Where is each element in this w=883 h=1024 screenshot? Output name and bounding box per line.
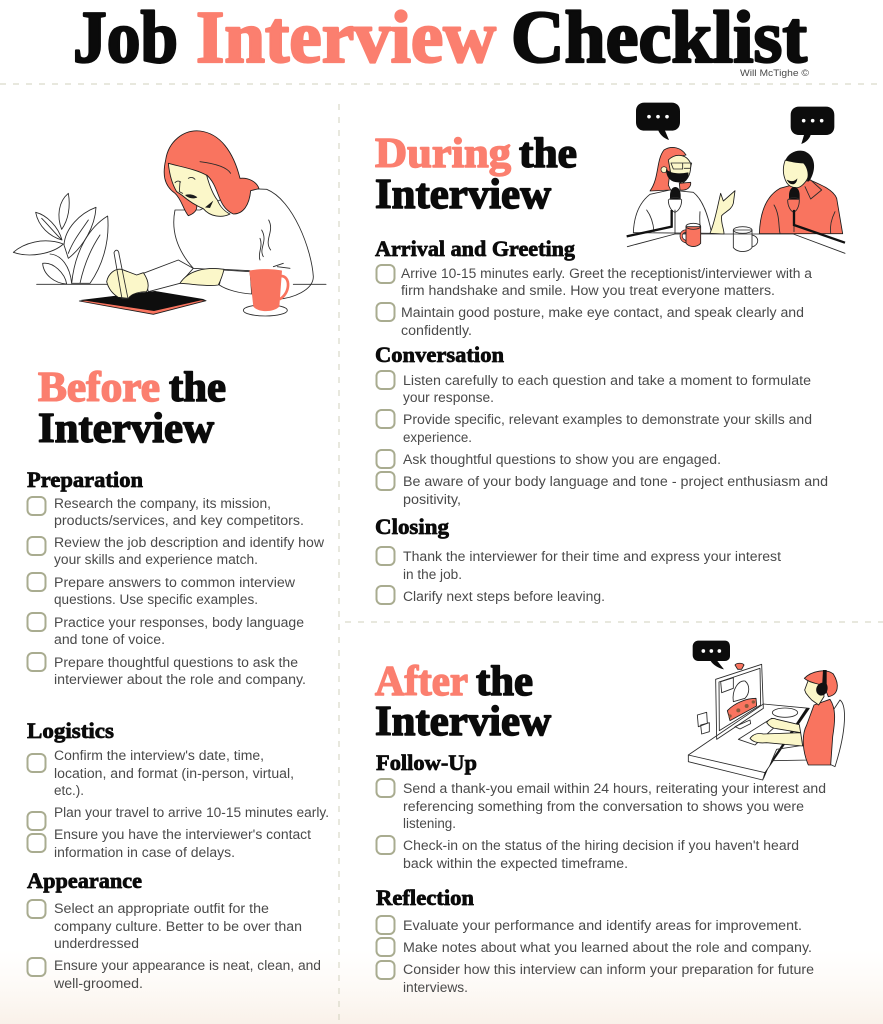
sweater (174, 188, 313, 299)
checklist: follow-up: Send a thank-you email within 24 hours, reiterating your interest and (403, 781, 826, 796)
checklist: conversation: Be aware of your body language and tone - project enthusiasm and (403, 474, 828, 489)
cream cup (733, 230, 758, 252)
checklist: reflection: Consider how this interview can inform your preparation for future (403, 962, 814, 977)
checklist: logistics: location, and format (in-person, virtual, (54, 766, 294, 781)
person (750, 670, 837, 765)
checklist: preparation: products/services, and key competitors. (54, 513, 304, 528)
heading: closing: Closing (375, 514, 449, 539)
checklist: preparation: interviewer about the role and company. (54, 672, 306, 687)
author credit: Will McTighe © (740, 68, 809, 79)
checklist: reflection: Make notes about what you learned about the role and company. (403, 940, 812, 955)
sticky notes (697, 712, 709, 734)
heading: during the interview: the (519, 131, 577, 177)
checklist: reflection: interviews. (403, 980, 468, 995)
heading: arrival and greeting: Arrival and Greeting (375, 236, 575, 261)
checklist: appearance: Select an appropriate outfit for the (54, 901, 269, 916)
heading: after the interview: the (476, 659, 533, 705)
left hand and pen (107, 269, 148, 298)
checklist: logistics: Confirm the interview's date, time, (54, 748, 264, 763)
desk (627, 210, 845, 243)
notepad (772, 708, 798, 717)
panel: logistics (27, 718, 329, 860)
checklist: logistics: information in case of delays. (54, 845, 235, 860)
checklist: conversation: positivity, (403, 492, 461, 507)
heading: during the interview: During (375, 131, 511, 177)
illustration: two people talking at microphones (627, 103, 845, 253)
checklist: follow-up: referencing something from the conversation to shows you were (403, 799, 804, 814)
checklist: logistics: Ensure you have the interviewer's contact (54, 827, 311, 842)
checklist: preparation: Research the company, its mission, (54, 496, 271, 511)
checklist: preparation: your skills and experience match. (54, 552, 258, 567)
checklist: follow-up (376, 779, 826, 871)
keyboard (738, 718, 782, 745)
checklist: appearance: well-groomed. (53, 976, 143, 991)
checklist: logistics: etc.). (54, 783, 84, 798)
checklist: arrival and greeting: Maintain good posture, make eye contact, and speak clearly and (401, 305, 804, 320)
illustration: person on video call at desk (688, 641, 845, 780)
left person (633, 147, 735, 234)
checklist: follow-up: Check-in on the status of the hiring decision if you haven't heard (403, 838, 799, 853)
monitor (716, 664, 763, 739)
checklist: appearance: company culture. Better to be over than (54, 919, 302, 934)
checklist: preparation: Practice your responses, body language (54, 615, 304, 630)
panel: appearance (27, 868, 321, 991)
checklist: arrival and greeting: Arrive 10-15 minutes early. Greet the receptionist/interviewer with a (401, 266, 813, 281)
heading: after the interview: After (375, 659, 468, 705)
heading: follow-up: Follow-Up (376, 750, 477, 775)
checklist: follow-up: back within the expected timeframe. (403, 856, 628, 871)
checklist: preparation: Prepare thoughtful questions to ask the (54, 655, 298, 670)
right hand (180, 268, 224, 286)
checklist: conversation: Listen carefully to each question and take a moment to formulate (403, 373, 811, 388)
hair (164, 131, 259, 216)
red cup (681, 231, 687, 242)
checklist: logistics (28, 748, 329, 860)
checklist: appearance: Ensure your appearance is neat, clean, and (54, 958, 321, 973)
checklist: conversation (376, 371, 828, 507)
panel: preparation (27, 467, 324, 687)
heading: logistics: Logistics (27, 718, 114, 743)
checklist: appearance: underdressed (54, 936, 139, 951)
heading: after the interview (375, 659, 552, 745)
face (168, 163, 230, 216)
heading: during the interview (375, 131, 577, 218)
desk (688, 704, 809, 773)
heading: before the interview (38, 365, 226, 452)
mug (259, 220, 290, 268)
speech bubble (693, 641, 730, 669)
panel: follow-up (376, 750, 826, 871)
heading: preparation: Preparation (27, 467, 143, 492)
panel: reflection (376, 885, 814, 995)
checklist: closing: in the job. (403, 567, 462, 582)
checklist: appearance (28, 900, 321, 991)
panel: conversation (375, 342, 828, 507)
checklist: closing: Thank the interviewer for their time and express your interest (403, 549, 781, 564)
illustration: woman writing on tablet (13, 131, 326, 316)
checklist: conversation: experience. (403, 430, 472, 445)
checklist: preparation: questions. Use specific examples. (54, 592, 258, 607)
checklist: closing (376, 547, 781, 604)
heading: after the interview: Interview (375, 699, 552, 745)
checklist: reflection: Evaluate your performance and identify areas for improvement. (403, 918, 802, 933)
heading: appearance: Appearance (27, 868, 142, 893)
checklist: arrival and greeting: confidently. (401, 323, 472, 338)
checklist: conversation: Ask thoughtful questions to show you are engaged. (403, 452, 721, 467)
heading: reflection: Reflection (376, 885, 474, 910)
webcam (735, 663, 744, 669)
tablet (79, 292, 206, 314)
panel: closing (375, 514, 781, 604)
speech bubble left (636, 103, 680, 140)
checklist: preparation: Review the job description and identify how (54, 535, 324, 550)
microphones (668, 187, 800, 234)
checklist: conversation: your response. (403, 390, 494, 405)
heading: during the interview: Interview (375, 172, 552, 218)
checklist: follow-up: listening. (403, 816, 456, 831)
plant (13, 193, 108, 284)
checklist: logistics: Plan your travel to arrive 10-15 minutes early. (54, 805, 329, 820)
checklist: closing: Clarify next steps before leaving. (403, 589, 605, 604)
checklist: preparation: Prepare answers to common interview (54, 575, 295, 590)
heading: before the interview: Before (38, 365, 160, 411)
checklist: reflection (376, 916, 814, 995)
checklist: arrival and greeting (376, 265, 813, 338)
chair (829, 700, 845, 767)
speech bubble right (791, 107, 834, 144)
heading: before the interview: Interview (38, 406, 215, 452)
checklist: conversation: Provide specific, relevant examples to demonstrate your skills and (403, 412, 812, 427)
checklist: preparation (28, 496, 324, 687)
title (73, 0, 807, 79)
checklist: preparation: and tone of voice. (54, 632, 165, 647)
right person (759, 151, 843, 234)
checklist: arrival and greeting: firm handshake and smile. How you treat everyone matters. (401, 283, 775, 298)
heading: before the interview: the (169, 365, 226, 411)
panel: arrival and greeting (375, 236, 813, 338)
heading: conversation: Conversation (375, 342, 504, 367)
